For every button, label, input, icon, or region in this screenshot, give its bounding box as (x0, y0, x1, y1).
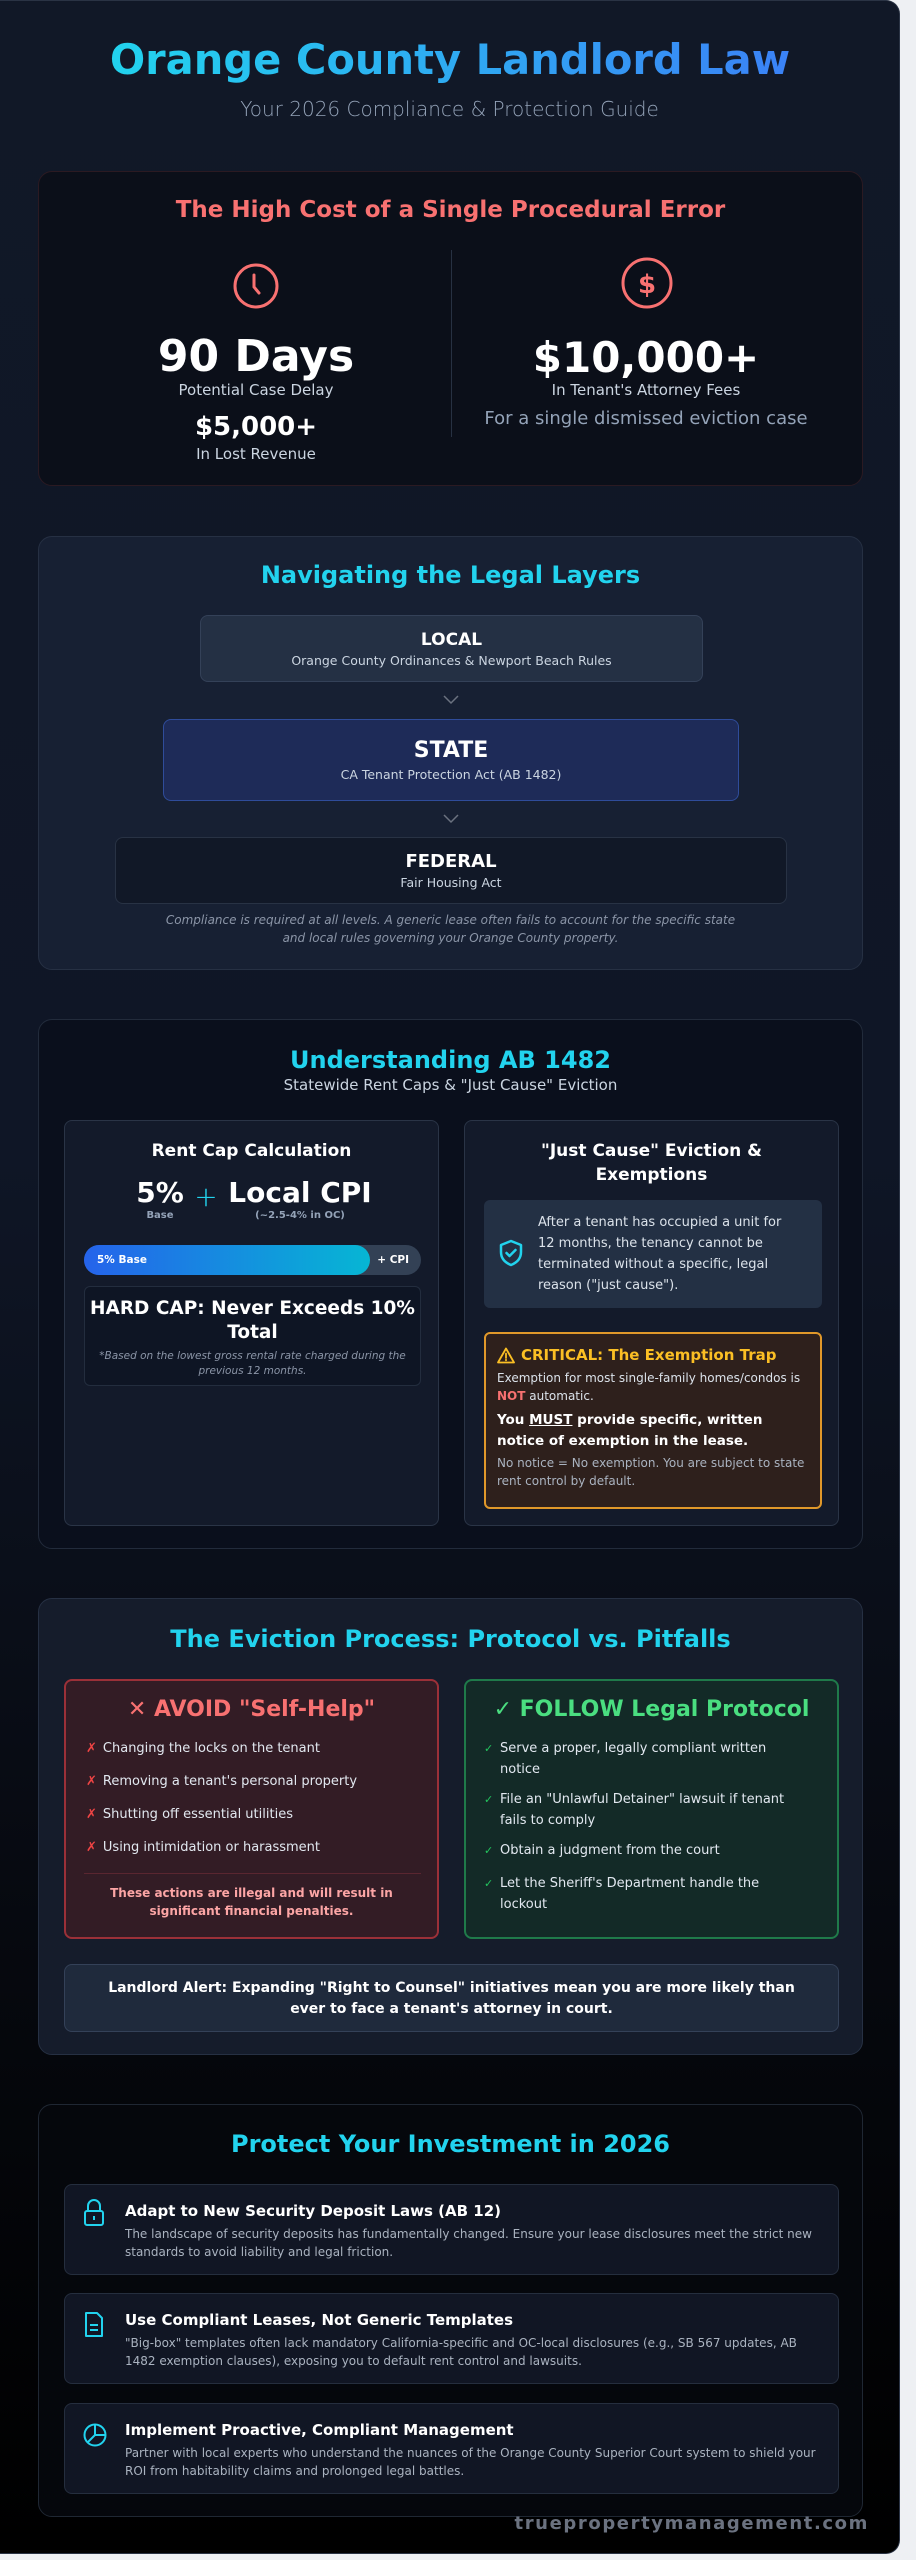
heading: Understanding AB 1482 (290, 1046, 611, 1074)
item: proactive management: Implement Proactive, Compliant Management (125, 2421, 514, 2439)
stat: 90 days: 90 Days (158, 331, 354, 382)
heading: Protect Your Investment in 2026 (231, 2130, 670, 2158)
list: ✗ Using intimidation or harassment (86, 1840, 320, 1855)
title: Orange County Landlord Law (110, 35, 790, 84)
callout: exemption trap: You MUST provide specific, written notice of exemption in the lease. (497, 1412, 762, 1449)
stat: attorney fees (484, 333, 808, 429)
list: ✓ (484, 1793, 493, 1806)
info box: After a tenant has occupied a unit for 12 months, the tenancy cannot be terminated without a specific, legal reason ("just cause"). (538, 1215, 781, 1293)
list: Obtain a judgment from the court (500, 1843, 720, 1858)
formula: + (194, 1180, 218, 1213)
icon: dollar (622, 258, 672, 308)
layer: state: STATE (414, 738, 488, 763)
item: compliant leases: "Big-box" templates often lack mandatory California-specific and OC-local disclosures (e.g., SB 567 updates, AB 1482 exemption clauses), exposing you to default rent control and lawsuits. (125, 2336, 797, 2368)
list: Let the Sheriff's Department handle the lockout (500, 1876, 759, 1912)
icon: chart (84, 2424, 106, 2446)
list: ✓ (484, 1742, 493, 1755)
card: just cause (464, 1120, 839, 1526)
info box (484, 1200, 822, 1308)
stat: lost revenue: $5,000+ (195, 412, 317, 442)
panel: AB 1482 (38, 1019, 863, 1549)
formula: (~2.5-4% in OC) (255, 1210, 345, 1221)
hard cap: Total (227, 1322, 278, 1343)
panel: legal layers (38, 536, 863, 970)
callout: landlord alert: Landlord Alert: Expanding "Right to Counsel" initiatives mean you are more likely than (108, 1980, 795, 1996)
list: ✓ (484, 1877, 493, 1890)
card title: ✕ AVOID "Self-Help" (128, 1697, 375, 1722)
icon: clock (234, 264, 278, 308)
item: proactive management (64, 2403, 839, 2494)
heading: The High Cost of a Single Procedural Error (176, 197, 725, 223)
bar chart (84, 1245, 421, 1275)
stat: attorney fees: $10,000+ (533, 333, 759, 382)
item: security deposit (64, 2184, 839, 2275)
label: case delay: Potential Case Delay (178, 381, 333, 399)
item: security deposit: The landscape of security deposits has fundamentally changed. Ensure your lease disclosures meet the strict new standards to avoid liability and legal friction. (125, 2227, 812, 2259)
callout: exemption trap: No notice = No exemption. You are subject to state rent control by default. (497, 1456, 804, 1488)
arrow (444, 696, 458, 704)
footer: website: truepropertymanagement.com (514, 2513, 869, 2534)
card title: ✓ FOLLOW Legal Protocol (494, 1697, 809, 1722)
layer: local (200, 615, 703, 682)
layer: federal: Fair Housing Act (400, 875, 502, 890)
layer: federal: FEDERAL (405, 851, 497, 872)
icon: document (85, 2312, 103, 2337)
layer: local: Orange County Ordinances & Newport Beach Rules (291, 652, 612, 668)
list: ✓ (484, 1844, 493, 1857)
formula (136, 1176, 372, 1221)
formula: Base (146, 1210, 174, 1221)
card: follow (464, 1679, 839, 1939)
caption: and local rules governing your Orange County property. (283, 931, 618, 945)
card title (541, 1141, 762, 1185)
hard cap (84, 1286, 421, 1386)
layer: federal (115, 837, 787, 904)
bar chart: 5% Base (97, 1254, 147, 1266)
item: security deposit: Adapt to New Security Deposit Laws (AB 12) (125, 2202, 501, 2220)
formula: Local CPI (228, 1176, 372, 1209)
panel: protect investment (38, 2104, 863, 2517)
layer: local: LOCAL (421, 630, 482, 650)
stat: attorney fees: In Tenant's Attorney Fees (552, 381, 740, 399)
icon: shield (500, 1240, 522, 1266)
arrow (444, 814, 458, 823)
card title: Rent Cap Calculation (152, 1141, 351, 1161)
bar chart: + CPI (377, 1254, 409, 1266)
hard cap: HARD CAP: Never Exceeds 10% (90, 1298, 415, 1319)
layer: state (163, 719, 739, 801)
hard cap: *Based on the lowest gross rental rate charged during the (99, 1350, 406, 1362)
stat: lost revenue (195, 412, 317, 463)
list: ✗ Removing a tenant's personal property (86, 1774, 357, 1789)
callout: exemption trap: CRITICAL: The Exemption Trap (521, 1346, 776, 1364)
item: compliant leases: Use Compliant Leases, Not Generic Templates (125, 2311, 513, 2329)
list: ✗ Changing the locks on the tenant (86, 1741, 320, 1756)
callout: exemption trap (484, 1332, 822, 1509)
layer: state: CA Tenant Protection Act (AB 1482) (341, 767, 561, 782)
item: proactive management: Partner with local experts who understand the nuances of the Orange County Superior Court system to shield your ROI from habitability claims and prolonged legal battles. (125, 2446, 816, 2478)
stat: attorney fees: For a single dismissed eviction case (484, 408, 808, 429)
list: ✗ Shutting off essential utilities (86, 1807, 293, 1822)
callout: landlord alert (64, 1964, 839, 2032)
hard cap: previous 12 months. (198, 1365, 307, 1377)
list: File an "Unlawful Detainer" lawsuit if tenant fails to comply (500, 1792, 784, 1828)
warning note: These actions are illegal and will result in (110, 1886, 393, 1900)
icon: dollar: $ (638, 270, 656, 300)
card: avoid (64, 1679, 439, 1939)
card title: Exemptions (596, 1165, 707, 1185)
caption (166, 913, 735, 945)
item: compliant leases (64, 2293, 839, 2384)
heading: The Eviction Process: Protocol vs. Pitfalls (170, 1625, 731, 1653)
subtitle: Your 2026 Compliance & Protection Guide (240, 97, 659, 121)
card title: "Just Cause" Eviction & (541, 1141, 762, 1161)
callout: landlord alert: ever to face a tenant's attorney in court. (290, 2001, 613, 2017)
list (484, 1741, 784, 1912)
subheading: Statewide Rent Caps & "Just Cause" Eviction (284, 1076, 617, 1094)
panel: high cost (38, 171, 863, 486)
warning note (110, 1886, 393, 1918)
formula: 5% (136, 1176, 184, 1209)
list: Serve a proper, legally compliant written notice (500, 1741, 766, 1777)
panel: eviction process (38, 1598, 863, 2055)
warning note: significant financial penalties. (150, 1904, 353, 1918)
callout: exemption trap: Exemption for most single-family homes/condos is NOT automatic. (497, 1371, 800, 1403)
card: rent cap (64, 1120, 439, 1526)
stat: lost revenue: In Lost Revenue (196, 445, 316, 463)
caption: Compliance is required at all levels. A generic lease often fails to account for the specific state (166, 913, 735, 927)
list (86, 1741, 357, 1855)
icon: lock (84, 2199, 104, 2226)
heading: Navigating the Legal Layers (261, 561, 640, 589)
